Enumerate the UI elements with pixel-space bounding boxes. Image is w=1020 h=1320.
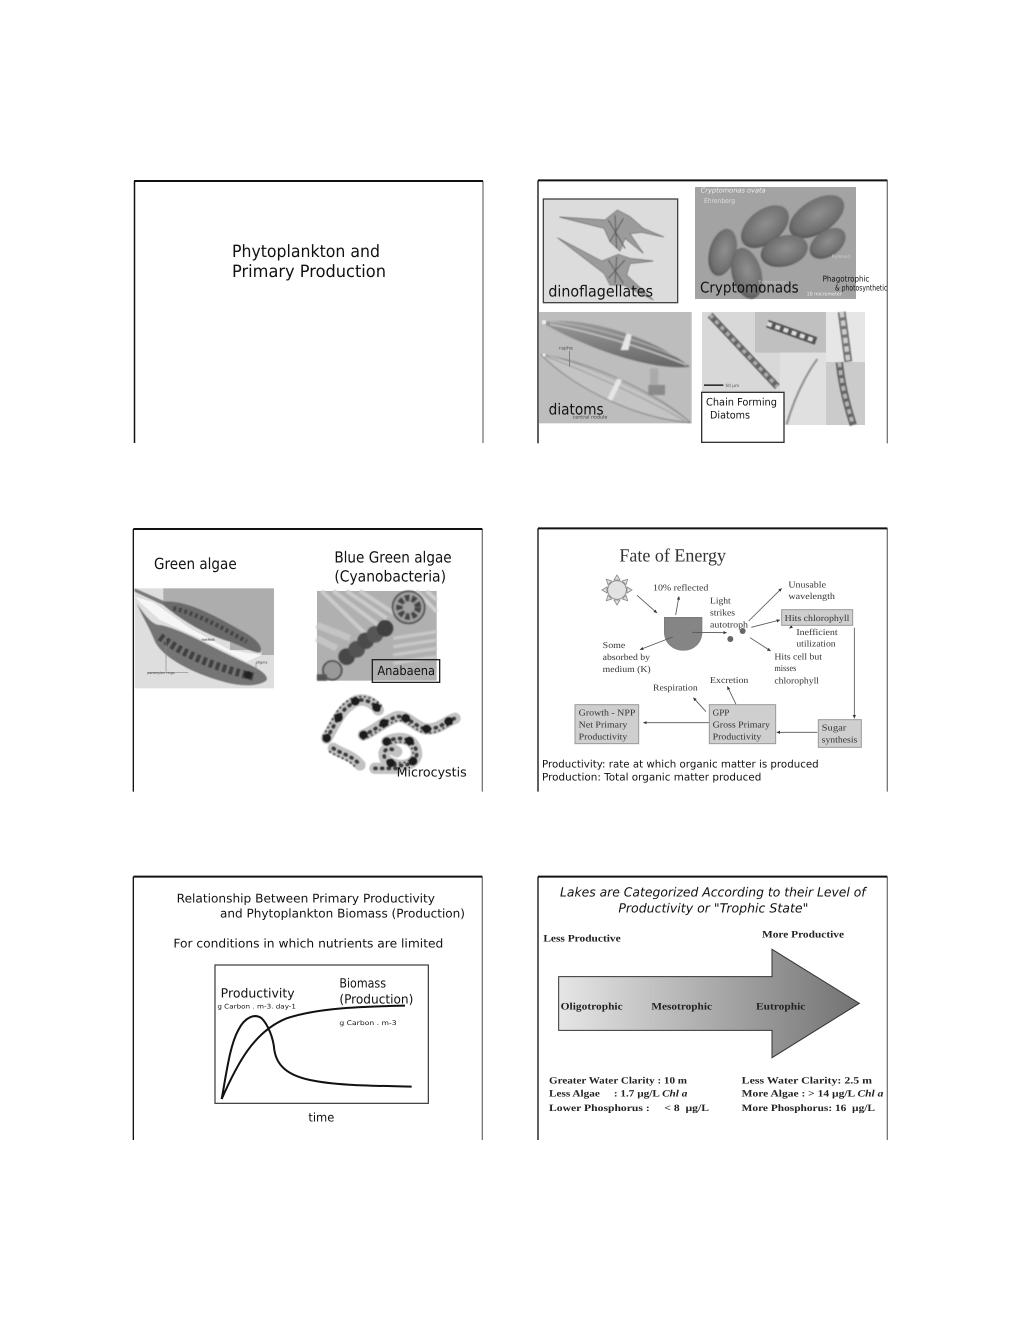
heading: and Phytoplankton Biomass (Production) bbox=[220, 907, 465, 921]
label: biomass: Biomass bbox=[339, 976, 386, 991]
box: sugar synthesis: Sugar bbox=[822, 723, 846, 733]
icon: autotroph cells bbox=[727, 628, 746, 642]
label: productivity: g Carbon . m-3. day-1 bbox=[217, 1003, 296, 1010]
diagram: energy flow: Light bbox=[710, 596, 731, 606]
label: biomass: (Production) bbox=[339, 992, 413, 1007]
diagram: energy flow: autotroph bbox=[710, 619, 748, 629]
photo: cryptomonads bbox=[695, 186, 887, 302]
label: diatoms: diatoms bbox=[549, 400, 604, 418]
slide 5: productivity and biomass bbox=[133, 877, 482, 1140]
box: growth NPP: Growth - NPP bbox=[579, 707, 635, 717]
subheading: For conditions in which nutrients are limited bbox=[173, 937, 443, 951]
label: phagotrophic and photosynthetic: & photosynthetic bbox=[835, 283, 887, 292]
diagram: energy flow: Excretion bbox=[710, 675, 749, 685]
text: eutrophic traits bbox=[742, 1075, 883, 1113]
photo: diatoms: central nodule bbox=[573, 415, 607, 420]
photo: chain forming diatoms: 50 µm bbox=[725, 383, 739, 388]
photo: cryptomonads: Ehrenberg bbox=[704, 197, 735, 205]
label: microcystis: Microcystis bbox=[397, 765, 467, 780]
diagram: energy flow: strikes bbox=[710, 607, 735, 617]
diagram: energy flow: Some bbox=[603, 640, 625, 650]
text: oligotrophic traits bbox=[549, 1075, 709, 1113]
diagram: energy flow: absorbed by bbox=[603, 652, 650, 662]
icon: water column bbox=[664, 617, 702, 650]
photo: green algae: stigma bbox=[256, 661, 267, 665]
text: eutrophic traits: More Algae : > 14 µg/L Chl a bbox=[742, 1088, 883, 1099]
diagram: energy flow: medium (K) bbox=[603, 664, 651, 674]
photo: diatoms: raphe bbox=[559, 346, 573, 351]
diagram: energy flow: wavelength bbox=[788, 591, 835, 601]
box: GPP: Gross Primary bbox=[713, 720, 770, 730]
text: eutrophic traits: More Phosphorus: 16 µg/L bbox=[742, 1103, 875, 1113]
callout: chain forming diatoms bbox=[702, 392, 784, 442]
photo: green algae bbox=[135, 588, 274, 688]
label: productivity bbox=[217, 986, 296, 1010]
line chart bbox=[215, 965, 428, 1103]
arrow: trophic gradient: Mesotrophic bbox=[651, 1001, 712, 1012]
heading: blue green algae: (Cyanobacteria) bbox=[334, 567, 446, 585]
icon: sun bbox=[602, 575, 632, 605]
slide 3: green and blue-green algae bbox=[133, 529, 482, 792]
text: eutrophic traits: Less Water Clarity: 2.5 m bbox=[742, 1075, 872, 1086]
heading: blue green algae: Blue Green algae bbox=[334, 548, 452, 566]
label: phagotrophic and photosynthetic: Phagotrophic bbox=[823, 274, 869, 283]
diagram: energy flow: chlorophyll bbox=[774, 675, 819, 685]
slide 1: title slide bbox=[134, 181, 483, 443]
box: GPP: GPP bbox=[713, 707, 729, 717]
text: oligotrophic traits: Lower Phosphorus : < 8 µg/L bbox=[549, 1103, 709, 1113]
photo: cryptomonads: Cryptomonas ovata bbox=[701, 186, 766, 194]
callout: chain forming diatoms: Diatoms bbox=[710, 409, 750, 421]
diagram: energy flow: misses bbox=[774, 663, 796, 673]
heading: fate of energy: Fate of Energy bbox=[619, 545, 726, 566]
slide 2: types of phytoplankton bbox=[538, 180, 887, 443]
photo: green algae: paramylon rings bbox=[147, 671, 175, 675]
box: growth NPP: Net Primary bbox=[579, 720, 628, 730]
diagram: energy flow: Unusable bbox=[788, 580, 826, 590]
curve: productivity bbox=[222, 1016, 412, 1099]
text: oligotrophic traits: Greater Water Clarity : 10 m bbox=[549, 1075, 687, 1086]
label: biomass: g Carbon . m-3 bbox=[339, 1019, 397, 1027]
text: oligotrophic traits: Less Algae : 1.7 µg/L Chl a bbox=[549, 1088, 687, 1099]
label: productivity: Productivity bbox=[221, 986, 295, 1001]
photo: diatoms bbox=[539, 312, 692, 423]
definitions bbox=[542, 758, 819, 783]
heading: Productivity or "Trophic State" bbox=[618, 901, 808, 915]
arrow: trophic gradient bbox=[559, 949, 859, 1058]
diagram: energy flow: Respiration bbox=[653, 682, 698, 692]
box: GPP bbox=[709, 705, 776, 744]
diagram: energy flow: utilization bbox=[796, 638, 836, 648]
photo: chain forming diatoms bbox=[702, 312, 865, 425]
heading: Lakes are Categorized According to their Level of bbox=[560, 885, 867, 900]
label: more productive: More Productive bbox=[762, 929, 844, 940]
photo: cryptomonads: Pyrenoid bbox=[832, 254, 850, 259]
definitions: Production: Total organic matter produced bbox=[542, 771, 761, 783]
title: Primary Production bbox=[232, 262, 386, 282]
label: anabaena: Anabaena bbox=[377, 663, 435, 678]
diagram: energy flow bbox=[575, 575, 861, 747]
arrow: trophic gradient: Oligotrophic bbox=[561, 1001, 623, 1012]
box: hits chlorophyll: Hits chlorophyll bbox=[785, 613, 849, 623]
label: cryptomonads: Cryptomonads bbox=[700, 279, 799, 296]
heading: green algae: Green algae bbox=[154, 555, 237, 573]
box: sugar synthesis: synthesis bbox=[822, 735, 857, 745]
heading bbox=[560, 885, 867, 915]
title: Phytoplankton and bbox=[232, 242, 380, 262]
photo: dinoflagellates bbox=[543, 199, 678, 303]
label: less productive: Less Productive bbox=[543, 933, 621, 944]
diagram: energy flow: Inefficient bbox=[796, 627, 838, 637]
arrow: trophic gradient: Eutrophic bbox=[756, 1001, 805, 1012]
photo: cryptomonads: 10 micrometer bbox=[807, 291, 842, 297]
axis label: time: time bbox=[308, 1111, 334, 1125]
heading: blue green algae bbox=[334, 548, 452, 585]
photo: microcystis bbox=[323, 697, 467, 780]
label: dinoflagellates: dinoflagellates bbox=[548, 282, 653, 300]
box: growth NPP: Productivity bbox=[579, 732, 628, 742]
photo: cryptomonads: Endosomes bbox=[758, 280, 787, 285]
photo: anabaena bbox=[317, 591, 440, 682]
heading: Relationship Between Primary Productivity bbox=[177, 892, 435, 905]
box: sugar synthesis bbox=[818, 720, 861, 747]
box: growth NPP bbox=[575, 705, 639, 744]
title bbox=[232, 242, 386, 282]
definitions: Productivity: rate at which organic matter is produced bbox=[542, 758, 819, 770]
curve: biomass bbox=[222, 1006, 405, 1099]
box: GPP: Productivity bbox=[713, 732, 762, 742]
diagram: energy flow: Hits cell but bbox=[774, 651, 822, 661]
label: phagotrophic and photosynthetic bbox=[823, 274, 887, 292]
slide 6: trophic state bbox=[538, 877, 887, 1140]
slide 4: fate of energy bbox=[538, 528, 887, 792]
callout: chain forming diatoms: Chain Forming bbox=[706, 396, 777, 408]
diagram: energy flow: 10% reflected bbox=[653, 583, 709, 593]
box: hits chlorophyll bbox=[782, 610, 853, 625]
label: biomass bbox=[339, 976, 413, 1027]
photo: green algae: nucleus bbox=[202, 638, 215, 642]
heading bbox=[177, 892, 465, 921]
